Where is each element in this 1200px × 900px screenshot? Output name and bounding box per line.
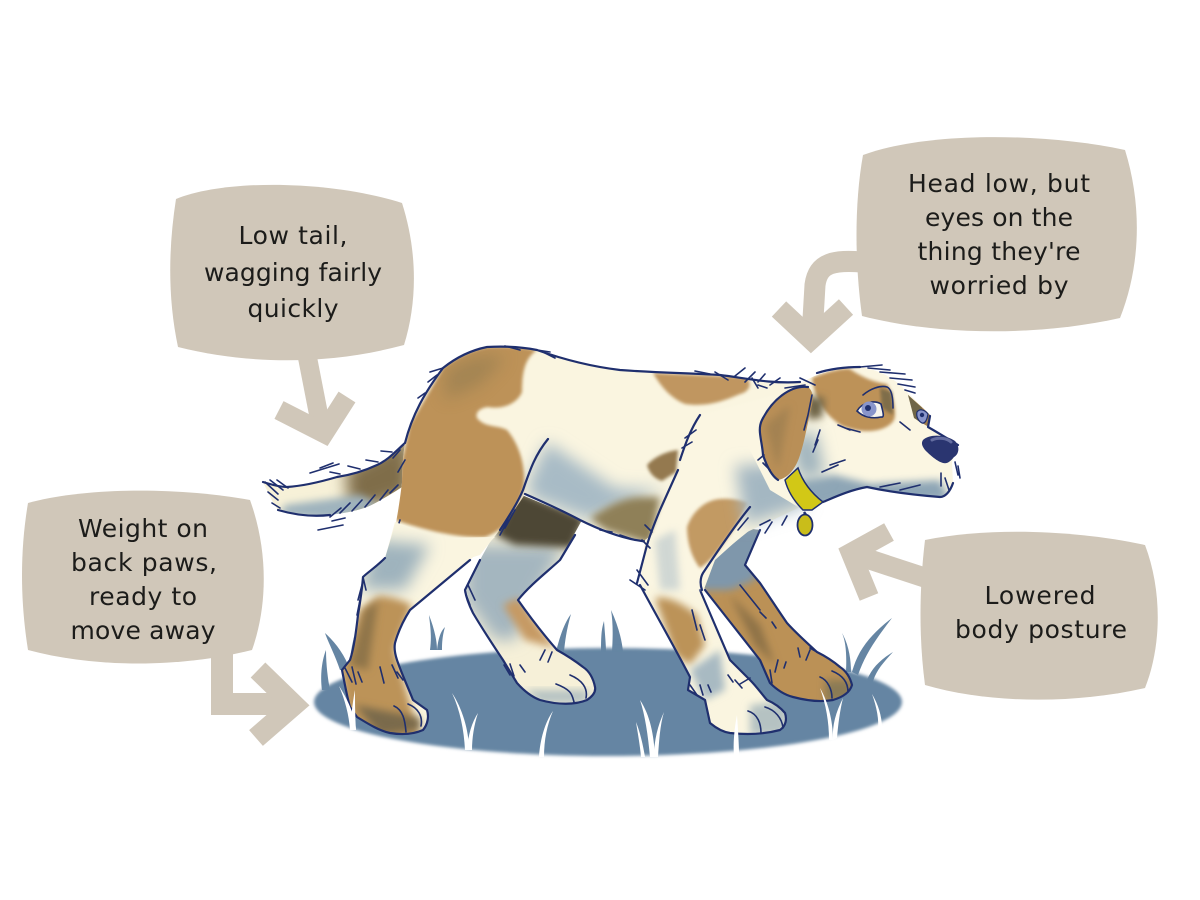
rump patch [395,347,537,537]
near hind leg [340,522,495,740]
near front leg [638,531,787,736]
head [745,365,960,536]
back patch [653,373,750,405]
callout: weight on back paws [22,491,264,664]
far front leg [695,525,855,702]
callout: low tail: quickly [248,294,339,323]
callout: lowered body posture: body posture [955,615,1127,644]
grass behind dog [321,610,893,690]
flank patch [647,450,678,481]
collar tag [798,512,812,536]
body [392,345,802,593]
infographic canvas [22,137,1158,758]
near eye [857,402,883,418]
callout arrow: body posture [851,532,926,597]
callout: weight on back paws: Weight on [78,514,208,543]
callout: weight on back paws: back paws, [71,548,217,577]
belly patch [590,497,660,545]
callout: head low: worried by [930,271,1069,300]
far eye [917,410,928,423]
callout arrow: back paws [222,650,294,738]
callout: weight on back paws: ready to [89,582,197,611]
ear [752,378,815,480]
callout: head low: eyes on the [925,203,1073,232]
collar [785,468,823,510]
callout: head low: Head low, but [908,169,1090,198]
head patch [812,369,895,431]
callout arrow: head [779,261,862,339]
callout: head low [856,137,1137,331]
callout: lowered body posture [920,532,1158,700]
callout: low tail: Low tail, [238,221,348,250]
far hind leg [465,490,595,704]
callout: lowered body posture: Lowered [984,581,1096,610]
grass in front of dog [339,686,882,757]
chest and shoulder [630,395,810,591]
dog illustration [263,346,960,757]
callout: weight on back paws: move away [70,616,216,645]
nose [922,436,958,463]
callout: low tail [170,185,414,360]
callout: low tail: wagging fairly [204,258,382,287]
shoulder patch [687,499,748,568]
ground shadow [314,648,902,756]
tail [263,435,410,530]
callout: head low: thing they're [918,237,1080,266]
callout arrow: tail [279,355,347,433]
